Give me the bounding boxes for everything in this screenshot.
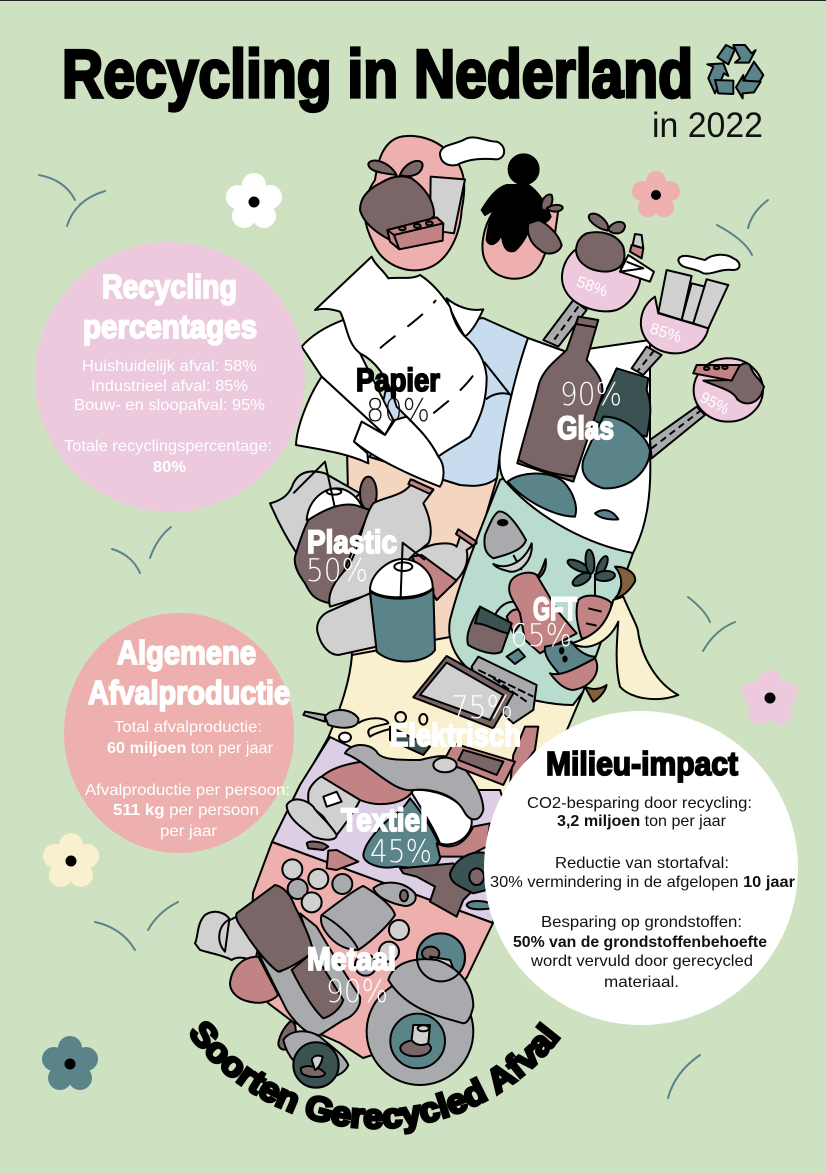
flower: lilac <box>742 670 798 724</box>
text block: Bouw- en sloopafval: 95% <box>74 397 265 414</box>
metal items <box>195 859 473 1088</box>
panel: algemene afvalproductie <box>64 613 294 853</box>
text block: Afvalproductie per persoon: <box>85 782 290 799</box>
curved caption: Soorten Gerecycled Afval <box>190 1020 562 1135</box>
label: gft: GFT <box>533 591 577 627</box>
label: elektrisch: 75% <box>451 690 513 726</box>
gft items <box>467 510 678 702</box>
paper sheets <box>296 257 512 487</box>
label: textiel: Textiel <box>341 802 428 838</box>
group: plastic and gft <box>270 462 678 702</box>
label: metaal: 90% <box>326 974 388 1010</box>
text block: Huishuidelijk afval: 58% <box>82 358 257 375</box>
balloon: 85% <box>632 255 740 375</box>
icon: recycling symbol <box>707 45 763 98</box>
heading: Milieu-impact <box>546 745 738 782</box>
icon: person with bag <box>482 154 563 279</box>
band: papier <box>370 318 528 486</box>
group: top bags and balloons <box>296 136 764 517</box>
band: glas <box>500 338 650 553</box>
heading: Afvalproductie <box>88 674 290 711</box>
heading: Recycling <box>102 268 237 305</box>
text block: materiaal. <box>604 974 679 991</box>
text block: Total afvalproductie: <box>114 719 262 736</box>
text block: 50% van de grondstoffenbehoefte <box>513 934 767 951</box>
labels: balloon percentages <box>574 274 732 418</box>
balloon: 95% <box>650 358 764 458</box>
labels: balloon percentages: 85% <box>648 320 683 346</box>
panel: milieu-impact <box>484 711 798 1025</box>
label: gft <box>510 591 577 654</box>
text block: 511 kg per persoon <box>113 802 259 819</box>
label: plastic: Plastic <box>307 524 397 560</box>
flower: teal <box>42 1036 98 1090</box>
label: metaal: Metaal <box>307 941 396 977</box>
labels: balloon percentages: 58% <box>574 274 610 301</box>
label: papier: 80% <box>366 393 430 429</box>
text block <box>85 719 290 840</box>
text block <box>490 795 795 991</box>
balloon: household waste bag <box>360 136 504 270</box>
subtitle: in 2022: in 2022 <box>652 106 763 145</box>
text block: Reductie van stortafval: <box>555 855 729 872</box>
balloon: 58% <box>543 214 654 347</box>
band: elektrisch <box>290 637 583 820</box>
text block: 80% <box>153 459 186 476</box>
label: glas: 90% <box>560 377 622 413</box>
band: textiel <box>272 737 510 923</box>
label: metaal <box>307 941 396 1010</box>
label: plastic <box>306 524 397 589</box>
electronics <box>303 656 538 785</box>
text block: wordt vervuld door gerecycled <box>530 953 753 970</box>
heading <box>83 268 257 345</box>
band: plastic <box>347 450 497 660</box>
label: papier <box>356 362 440 429</box>
title: Recycling in Nederland <box>62 36 693 112</box>
label: textiel <box>341 802 432 870</box>
group: textile and metal <box>195 745 492 1088</box>
text block: Totale recyclingspercentage: <box>64 438 272 455</box>
labels: balloon percentages: 95% <box>697 389 732 418</box>
label: elektrisch: Elektrisch <box>390 717 521 753</box>
flower: white <box>226 173 282 228</box>
flower: pink <box>632 171 680 217</box>
text block: Besparing op grondstoffen: <box>541 914 742 931</box>
text block: CO2-besparing door recycling: <box>527 795 752 812</box>
text block: Industrieel afval: 85% <box>91 378 248 395</box>
label: glas <box>557 377 622 446</box>
label: glas: Glas <box>557 410 614 446</box>
textile items <box>287 745 492 917</box>
label: elektrisch <box>390 690 521 753</box>
grass strokes <box>39 175 768 1098</box>
text block: 30% vermindering in de afgelopen 10 jaar <box>490 874 795 891</box>
heading: percentages <box>83 308 257 345</box>
figure: coloured waste bands <box>250 318 650 1058</box>
band: gft <box>449 460 650 705</box>
heading <box>88 634 290 711</box>
text block: 60 miljoen ton per jaar <box>107 740 274 757</box>
text block <box>64 358 272 476</box>
label: papier: Papier <box>356 362 440 398</box>
text block: per jaar <box>160 823 218 840</box>
plastic items <box>270 462 477 662</box>
label: plastic: 50% <box>306 553 368 589</box>
band: metaal <box>250 842 493 1058</box>
label: gft: 65% <box>510 618 572 654</box>
heading: Algemene <box>117 634 256 671</box>
text block: 3,2 miljoen ton per jaar <box>557 813 727 830</box>
flower: cream <box>43 833 99 887</box>
panel: recycling percentages <box>35 242 305 512</box>
label: textiel: 45% <box>370 834 432 870</box>
glass bottles <box>508 317 650 517</box>
